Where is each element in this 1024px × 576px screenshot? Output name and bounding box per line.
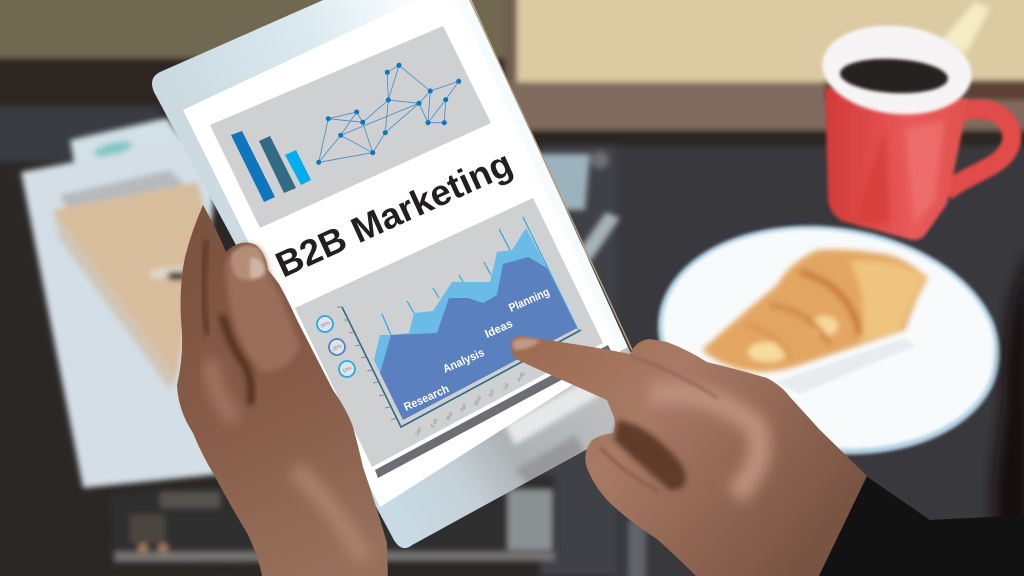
paper stack and folder bbox=[21, 118, 260, 488]
wallet and coins under the tablet bbox=[110, 475, 646, 576]
thumb nail bbox=[231, 246, 265, 281]
chart spikes bbox=[382, 217, 578, 335]
percent circles: 20% bbox=[332, 343, 344, 353]
percent circles: 10% bbox=[342, 365, 354, 375]
percent circles bbox=[317, 316, 355, 377]
month labels: Jan bbox=[414, 426, 423, 437]
month labels: Feb bbox=[430, 418, 440, 429]
dark area bbox=[380, 257, 577, 420]
month labels: Apr bbox=[459, 402, 468, 413]
person dark edge and sleeve bbox=[815, 250, 1024, 576]
croissant bbox=[702, 250, 928, 372]
finger shadows bbox=[614, 420, 686, 490]
tablet lower reflection bbox=[376, 347, 630, 548]
axis ticks bbox=[337, 307, 396, 420]
palm creases bbox=[222, 315, 251, 405]
chart labels: Analysis bbox=[441, 347, 486, 376]
knife bbox=[775, 338, 915, 394]
plate bbox=[643, 204, 1015, 476]
tablet body bbox=[152, 0, 660, 570]
mug handle bbox=[946, 109, 1012, 192]
month labels: Jun bbox=[487, 388, 496, 399]
percent circles: 30% bbox=[320, 320, 332, 330]
lower gray panel bbox=[295, 198, 612, 478]
sleeve bbox=[815, 476, 1024, 576]
right hand pointing at chart bbox=[510, 336, 867, 576]
month labels: Aug bbox=[516, 371, 526, 383]
month labels bbox=[414, 371, 526, 437]
title: B2B Marketing bbox=[269, 142, 518, 285]
icon: network graph bbox=[316, 63, 461, 165]
tablet screen bbox=[183, 0, 621, 507]
thumb bbox=[226, 244, 300, 372]
knuckle highlight bbox=[650, 393, 760, 495]
axes bbox=[342, 307, 581, 427]
chart labels: Ideas bbox=[483, 318, 515, 341]
coffee spoon bbox=[942, 2, 990, 55]
area chart bbox=[317, 217, 581, 437]
icon: bar chart bbox=[231, 131, 311, 202]
top gray panel bbox=[210, 26, 491, 228]
month labels: Mar bbox=[445, 411, 455, 422]
chart labels: Research bbox=[402, 383, 451, 414]
fingernail bbox=[512, 338, 540, 350]
blurred objects behind tablet bbox=[537, 151, 620, 262]
red coffee mug bbox=[818, 18, 1012, 240]
month labels: Jul bbox=[502, 382, 511, 391]
coffee bbox=[839, 56, 949, 96]
light area bbox=[374, 228, 547, 400]
chart labels bbox=[402, 286, 552, 414]
chart labels: Planning bbox=[507, 286, 552, 315]
left hand holding tablet bbox=[177, 205, 388, 576]
month labels: May bbox=[473, 395, 483, 407]
bottom dark bar bbox=[375, 345, 612, 478]
mug rim bbox=[818, 18, 976, 122]
